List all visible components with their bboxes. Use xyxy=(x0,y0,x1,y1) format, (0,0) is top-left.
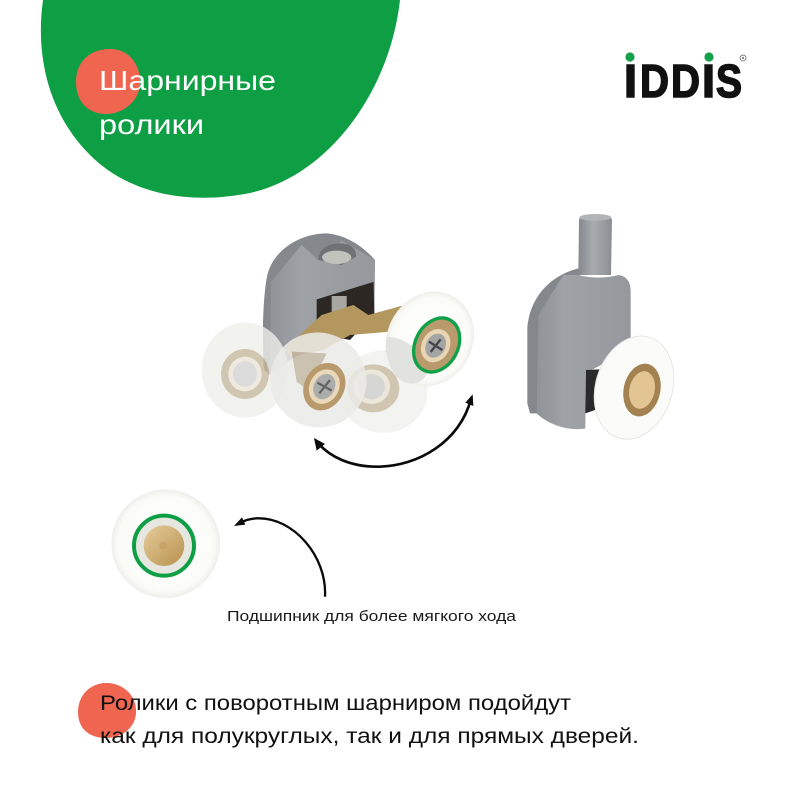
wheel bearing xyxy=(619,360,665,420)
footer text: Ролики с поворотным шарниром подойдут xyxy=(100,692,571,715)
bearing caption: Подшипник для более мягкого хода xyxy=(227,608,517,625)
grey housing back xyxy=(263,233,375,375)
footer text xyxy=(100,692,639,748)
top screw recess xyxy=(318,243,356,265)
wheel xyxy=(582,326,686,449)
dark slot xyxy=(585,369,599,413)
ghost wheel right xyxy=(339,350,428,433)
logo: IDDIS: D xyxy=(640,55,669,107)
bearing arrow xyxy=(234,517,325,597)
logo: IDDIS: I xyxy=(702,55,715,107)
product: swivel roller with rotation ghosts xyxy=(202,233,491,467)
green header shape xyxy=(41,0,400,198)
logo: IDDIS: D xyxy=(671,55,700,107)
brass arm xyxy=(285,304,408,357)
ghost wheel left xyxy=(202,322,288,418)
pin xyxy=(578,214,612,275)
bearing detail wheel xyxy=(111,489,220,598)
logo: IDDIS xyxy=(624,52,746,107)
ghost wheel front xyxy=(255,317,382,443)
title: Шарнирные xyxy=(99,65,276,96)
pin top xyxy=(579,214,611,221)
housing front xyxy=(537,275,631,429)
footer text: как для полукруглых, так и для прямых дверей. xyxy=(100,725,639,748)
logo: IDDIS: S xyxy=(716,55,742,107)
title xyxy=(99,65,276,140)
grey housing front xyxy=(270,241,375,375)
logo: IDDIS: I xyxy=(624,55,637,107)
title: ролики xyxy=(99,109,204,140)
bolt xyxy=(332,296,347,313)
housing opening xyxy=(315,278,374,340)
footer accent blob xyxy=(78,683,136,738)
top screw xyxy=(322,251,351,264)
housing back xyxy=(527,268,580,413)
title accent blob xyxy=(76,49,140,114)
solid wheel with green bearing ring xyxy=(369,276,491,402)
rotation arrow xyxy=(314,394,473,467)
product: roller side view xyxy=(527,214,686,449)
